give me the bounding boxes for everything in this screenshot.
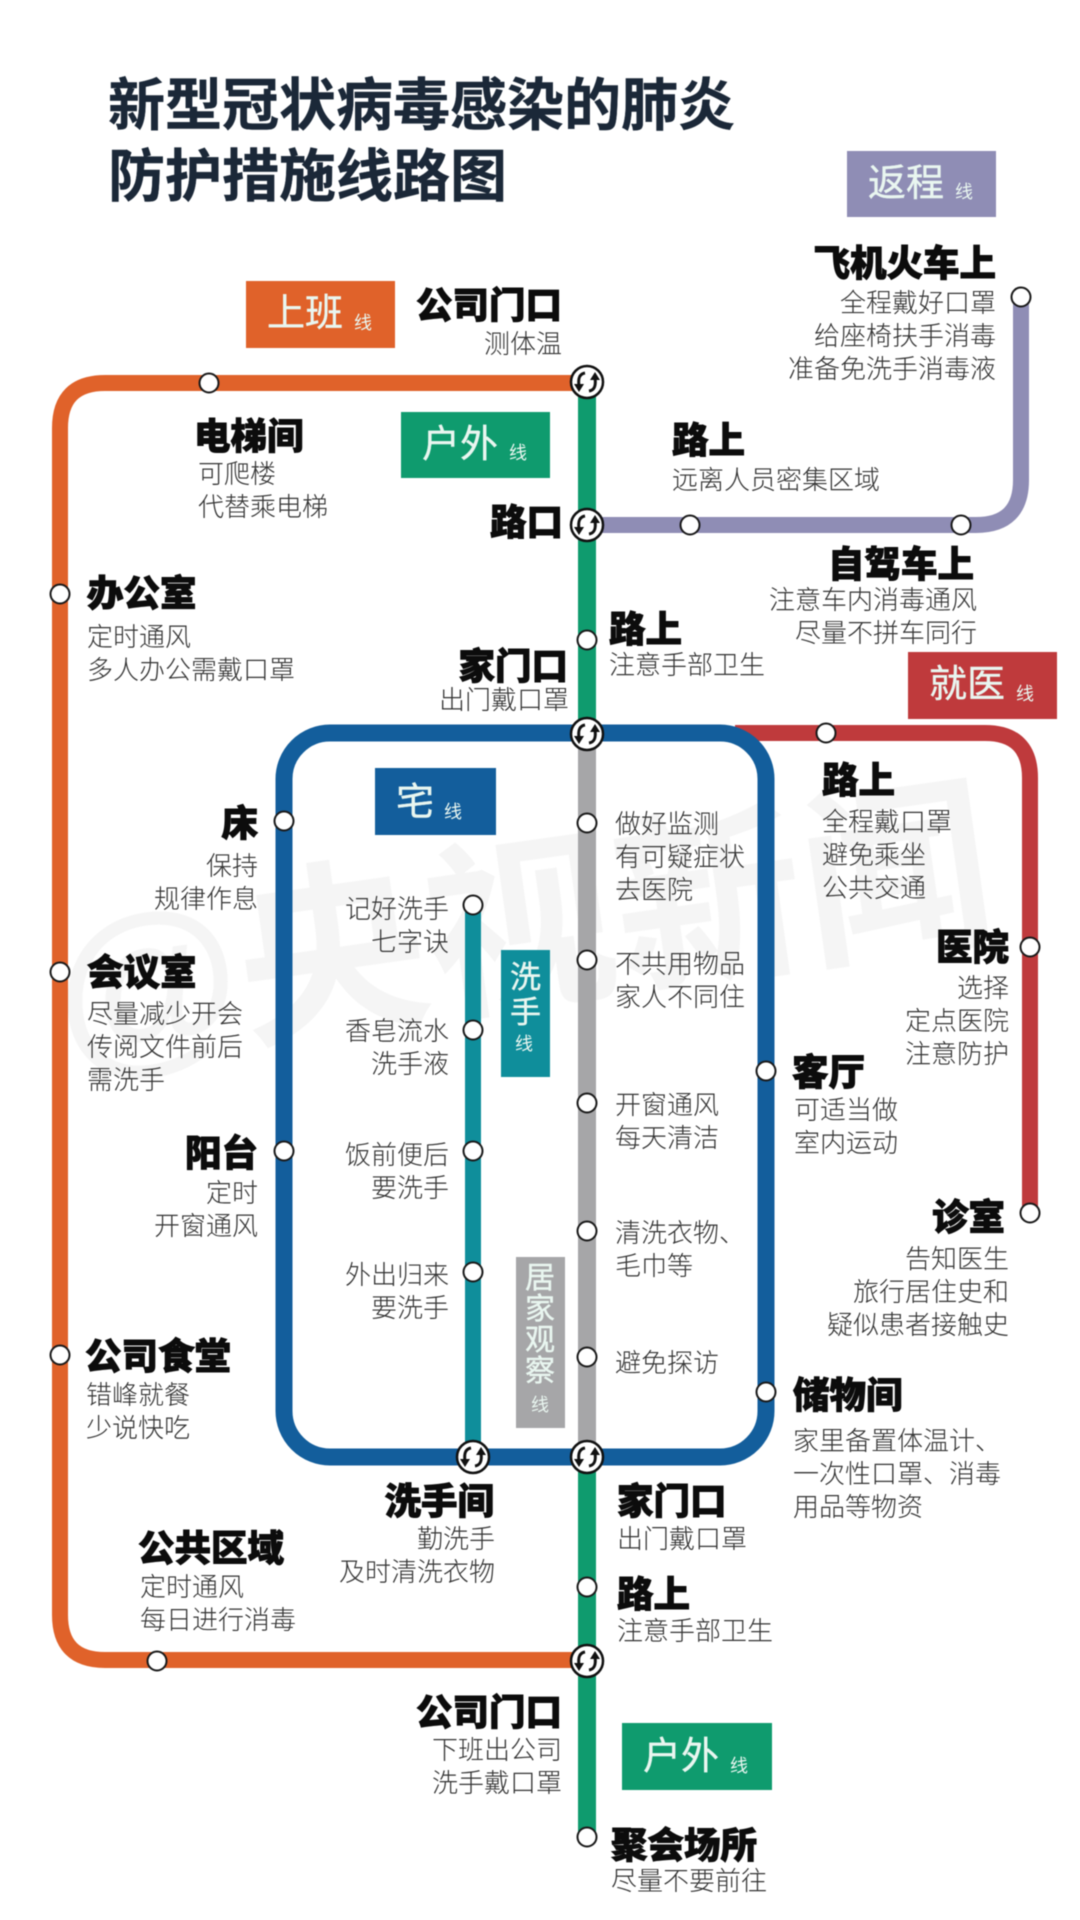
label: 聚会场所: 尽量不要前往 <box>611 1866 767 1896</box>
title: 防护措施线路图 <box>108 145 507 209</box>
label: 诊室: 疑似患者接触史 <box>827 1310 1009 1340</box>
grey line: 居家观察 <box>578 733 596 1457</box>
label: 会议室: 传阅文件前后 <box>87 1032 243 1062</box>
label: 公司食堂: 公司食堂 <box>85 1336 231 1377</box>
line tag: 洗手: 手 <box>510 995 541 1030</box>
interchange icons <box>457 366 603 1677</box>
label: 自驾车上: 注意车内消毒通风 <box>769 585 977 615</box>
label: 家门口 lower: 家门口 <box>617 1481 726 1522</box>
label: 诊室: 告知医生 <box>905 1244 1009 1274</box>
label: 家门口 lower <box>617 1481 747 1554</box>
text: 外出归来: 外出归来 <box>345 1260 449 1290</box>
text: 做好监测: 去医院 <box>615 875 693 905</box>
line tag: 户外 lower <box>622 1723 772 1790</box>
label: 家门口 upper: 出门戴口罩 <box>439 685 569 715</box>
line tag: 上班: 上班 <box>267 293 343 335</box>
text: 做好监测 <box>615 809 745 905</box>
text: 清洗衣物: 毛巾等 <box>615 1251 693 1281</box>
text: 开窗通风 <box>615 1090 719 1153</box>
label: 飞机火车上: 飞机火车上 <box>814 243 996 284</box>
label: 电梯间: 电梯间 <box>194 416 304 457</box>
line tag: 宅 <box>375 768 496 835</box>
text: 香皂流水 <box>345 1016 449 1079</box>
line tag: 上班 <box>246 281 395 348</box>
label: 飞机火车上 <box>788 243 996 384</box>
label: 公司门口 top <box>416 285 562 359</box>
label: 路上 green upper <box>608 609 765 680</box>
line tag: 居家观察 <box>516 1257 565 1428</box>
label: 路上 green lower: 注意手部卫生 <box>617 1616 773 1646</box>
line tag: 居家观察: 家 <box>525 1293 555 1326</box>
label: 公司门口 bottom: 洗手戴口罩 <box>432 1768 562 1798</box>
label: 阳台 <box>154 1132 258 1241</box>
label: 储物间: 一次性口罩、消毒 <box>793 1459 1001 1489</box>
label: 路上 purple: 远离人员密集区域 <box>672 465 880 495</box>
label: 医院: 医院 <box>936 927 1009 968</box>
line tag: 洗手: 洗 <box>510 960 541 995</box>
label: 路上 purple <box>672 420 880 495</box>
label: 公司门口 bottom: 下班出公司 <box>432 1735 562 1765</box>
label: 阳台: 阳台 <box>185 1133 258 1174</box>
label: 公司食堂: 少说快吃 <box>86 1413 190 1443</box>
label: 路上 red: 路上 <box>822 760 895 801</box>
label: 路上 green upper: 路上 <box>609 609 682 650</box>
orange line: 上班 <box>60 383 587 1660</box>
line tag: 户外 upper: 户外 <box>422 424 498 466</box>
line tag: 户外 lower: 线 <box>730 1756 748 1776</box>
label: 电梯间: 代替乘电梯 <box>198 492 328 522</box>
label: 医院 <box>905 927 1010 1069</box>
label: 医院: 注意防护 <box>905 1039 1009 1069</box>
line tag: 居家观察: 线 <box>531 1395 549 1415</box>
label: 路上 green upper: 注意手部卫生 <box>609 650 765 680</box>
text: 不共用物品 <box>615 949 745 1012</box>
line tag: 返程 <box>847 151 996 217</box>
line tag: 居家观察: 观 <box>525 1324 555 1357</box>
label: 路上 green lower: 路上 <box>617 1574 690 1615</box>
text: 开窗通风: 开窗通风 <box>615 1090 719 1120</box>
label: 会议室: 尽量减少开会 <box>87 999 243 1029</box>
label: 公共区域: 每日进行消毒 <box>140 1605 296 1635</box>
label: 办公室: 定时通风 <box>87 622 191 652</box>
label: 家门口 upper <box>439 646 569 715</box>
label: 公共区域: 公共区域 <box>138 1528 284 1569</box>
line tag: 户外 lower: 户外 <box>643 1736 719 1778</box>
label: 会议室: 会议室 <box>87 952 196 993</box>
line tag: 居家观察: 察 <box>525 1355 555 1388</box>
line tag: 就医: 就医 <box>929 664 1005 706</box>
label: 床: 保持 <box>206 851 258 881</box>
label: 公司门口 top: 公司门口 <box>416 285 562 326</box>
stations <box>50 288 1040 1846</box>
text: 记好洗手: 记好洗手 <box>345 894 449 924</box>
label: 储物间: 家里备置体温计、 <box>793 1426 1001 1456</box>
label: 床: 规律作息 <box>154 884 258 914</box>
label: 客厅: 室内运动 <box>794 1128 898 1158</box>
text: 避免探访: 避免探访 <box>615 1348 719 1378</box>
blue loop: 宅 <box>284 733 766 1457</box>
text: 饭前便后: 要洗手 <box>371 1173 449 1203</box>
label: 路上 red: 避免乘坐 <box>822 840 926 870</box>
title <box>108 74 735 209</box>
label: 储物间: 用品等物资 <box>793 1492 923 1522</box>
label: 家门口 lower: 出门戴口罩 <box>617 1524 747 1554</box>
text: 香皂流水: 洗手液 <box>371 1049 449 1079</box>
label: 阳台: 开窗通风 <box>154 1211 258 1241</box>
label: 储物间 <box>792 1375 1001 1522</box>
label: 公司门口 bottom: 公司门口 <box>416 1692 562 1733</box>
label: 洗手间 <box>339 1481 495 1587</box>
text: 饭前便后: 饭前便后 <box>345 1140 449 1170</box>
line tag: 返程: 返程 <box>868 163 944 205</box>
label: 办公室 <box>86 573 295 685</box>
title: 新型冠状病毒感染的肺炎 <box>108 74 735 138</box>
purple line: 返程 <box>587 297 1021 525</box>
text: 外出归来 <box>345 1260 449 1323</box>
label: 办公室: 多人办公需戴口罩 <box>87 655 295 685</box>
label: 路上 red <box>822 760 952 903</box>
label: 聚会场所: 聚会场所 <box>611 1825 757 1866</box>
label: 办公室: 办公室 <box>87 573 196 614</box>
label: 诊室: 旅行居住史和 <box>853 1277 1009 1307</box>
label: 路口: 路口 <box>490 502 563 543</box>
label: 洗手间: 及时清洗衣物 <box>339 1557 495 1587</box>
label: 聚会场所 <box>610 1825 767 1896</box>
label: 床: 床 <box>222 803 258 844</box>
text: 记好洗手 <box>345 894 449 957</box>
label: 公司食堂: 错峰就餐 <box>86 1380 190 1410</box>
text: 不共用物品: 不共用物品 <box>615 949 745 979</box>
label: 飞机火车上: 给座椅扶手消毒 <box>814 321 996 351</box>
text: 记好洗手: 七字诀 <box>371 927 449 957</box>
label: 诊室 <box>827 1197 1009 1340</box>
line tag: 就医: 线 <box>1016 684 1034 704</box>
label: 公司食堂 <box>85 1336 231 1443</box>
text: 开窗通风: 每天清洁 <box>615 1123 719 1153</box>
label: 阳台: 定时 <box>206 1178 258 1208</box>
label: 诊室: 诊室 <box>932 1197 1005 1238</box>
label: 路上 green lower <box>616 1574 773 1646</box>
label: 自驾车上: 尽量不拼车同行 <box>795 618 977 648</box>
text: 做好监测: 有可疑症状 <box>615 842 745 872</box>
text: 做好监测: 做好监测 <box>615 809 719 839</box>
label: 床 <box>154 803 259 914</box>
label: 路上 purple: 路上 <box>672 420 745 461</box>
label: 电梯间: 可爬楼 <box>198 459 276 489</box>
label: 路上 red: 全程戴口罩 <box>822 807 952 837</box>
label: 公共区域: 定时通风 <box>140 1572 244 1602</box>
teal line: 洗手 <box>465 905 481 1457</box>
label: 会议室 <box>86 952 243 1095</box>
label: 飞机火车上: 全程戴好口罩 <box>840 288 996 318</box>
label: 客厅: 客厅 <box>792 1052 865 1093</box>
label: 公司门口 bottom <box>416 1692 562 1798</box>
label: 飞机火车上: 准备免洗手消毒液 <box>788 354 996 384</box>
line tag: 宅: 宅 <box>396 782 434 824</box>
label: 自驾车上: 自驾车上 <box>828 544 974 585</box>
text: 香皂流水: 香皂流水 <box>345 1016 449 1046</box>
label: 医院: 选择 <box>957 973 1009 1003</box>
line tag: 上班: 线 <box>354 313 372 333</box>
line tag: 宅: 线 <box>444 802 462 822</box>
label: 公司门口 top: 测体温 <box>484 329 562 359</box>
label: 电梯间 <box>194 416 328 522</box>
label: 会议室: 需洗手 <box>87 1065 165 1095</box>
label: 洗手间: 勤洗手 <box>417 1524 495 1554</box>
line tag: 户外 upper: 线 <box>509 443 527 463</box>
label: 医院: 定点医院 <box>905 1006 1009 1036</box>
text: 外出归来: 要洗手 <box>371 1293 449 1323</box>
line tag: 就医 <box>908 652 1057 719</box>
line tag: 返程: 线 <box>955 182 973 202</box>
label: 客厅 <box>792 1052 898 1158</box>
text: 清洗衣物: 清洗衣物、 <box>615 1218 745 1248</box>
label: 客厅: 可适当做 <box>794 1095 898 1125</box>
text: 饭前便后 <box>345 1140 449 1203</box>
text: 清洗衣物 <box>615 1218 745 1281</box>
line tag: 洗手: 线 <box>515 1034 533 1054</box>
line tag: 洗手 <box>501 950 550 1077</box>
line tag: 户外 upper <box>401 412 550 478</box>
text: 不共用物品: 家人不同住 <box>615 982 745 1012</box>
label: 家门口 upper: 家门口 <box>458 646 568 687</box>
label: 储物间: 储物间 <box>793 1375 902 1416</box>
label: 路上 red: 公共交通 <box>822 873 926 903</box>
watermark: @央视新闻 <box>40 759 1005 1101</box>
label: 自驾车上 <box>769 544 977 648</box>
label: 洗手间: 洗手间 <box>384 1481 494 1522</box>
label: 公共区域 <box>138 1528 296 1635</box>
green line: 户外 <box>578 383 596 1837</box>
line tag: 居家观察: 居 <box>525 1262 555 1295</box>
red line: 就医 <box>735 733 1030 1213</box>
